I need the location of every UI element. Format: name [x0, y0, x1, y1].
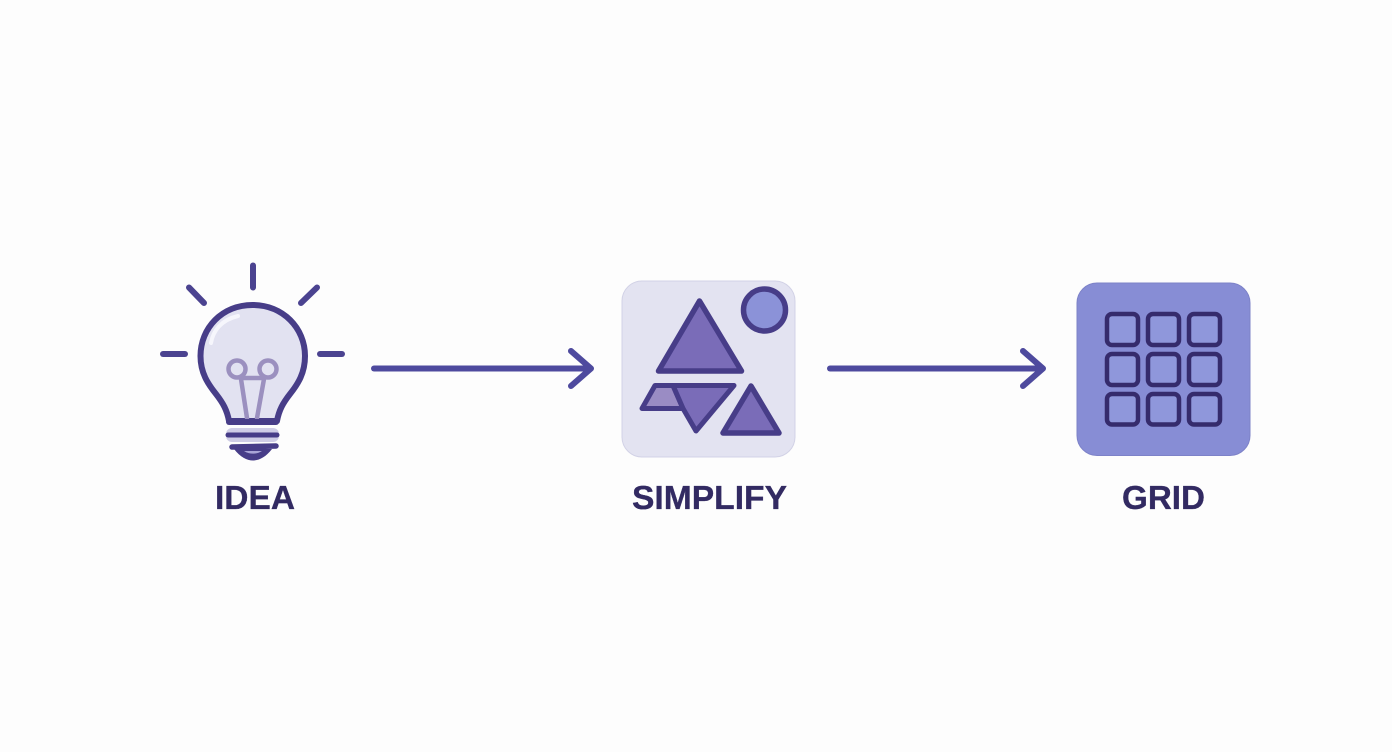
icon: glass highlight [211, 316, 238, 343]
arrow: idea to simplify [374, 351, 591, 386]
label: simplify: SIMPLIFY [632, 479, 787, 516]
label: grid: GRID [1122, 479, 1205, 516]
step: grid [1077, 283, 1250, 516]
icon: bulb glass [200, 305, 305, 421]
step: simplify [622, 281, 795, 516]
panel: simplify tile [622, 281, 795, 457]
icon: small triangle [723, 386, 779, 433]
icon: grid of squares [1107, 314, 1220, 424]
panel: grid tile [1077, 283, 1250, 456]
icon: light bulb [163, 266, 342, 460]
icon: bulb base [226, 419, 279, 460]
label: idea: IDEA [215, 479, 295, 516]
icon: inverted triangle [673, 386, 734, 431]
arrow: simplify to grid [830, 351, 1043, 386]
icon: large triangle [658, 301, 742, 371]
icon: filament [228, 360, 276, 418]
icon: parallelogram [642, 386, 683, 408]
step: idea [163, 266, 342, 516]
icon: circle [744, 289, 786, 331]
icon: light rays [163, 266, 342, 354]
